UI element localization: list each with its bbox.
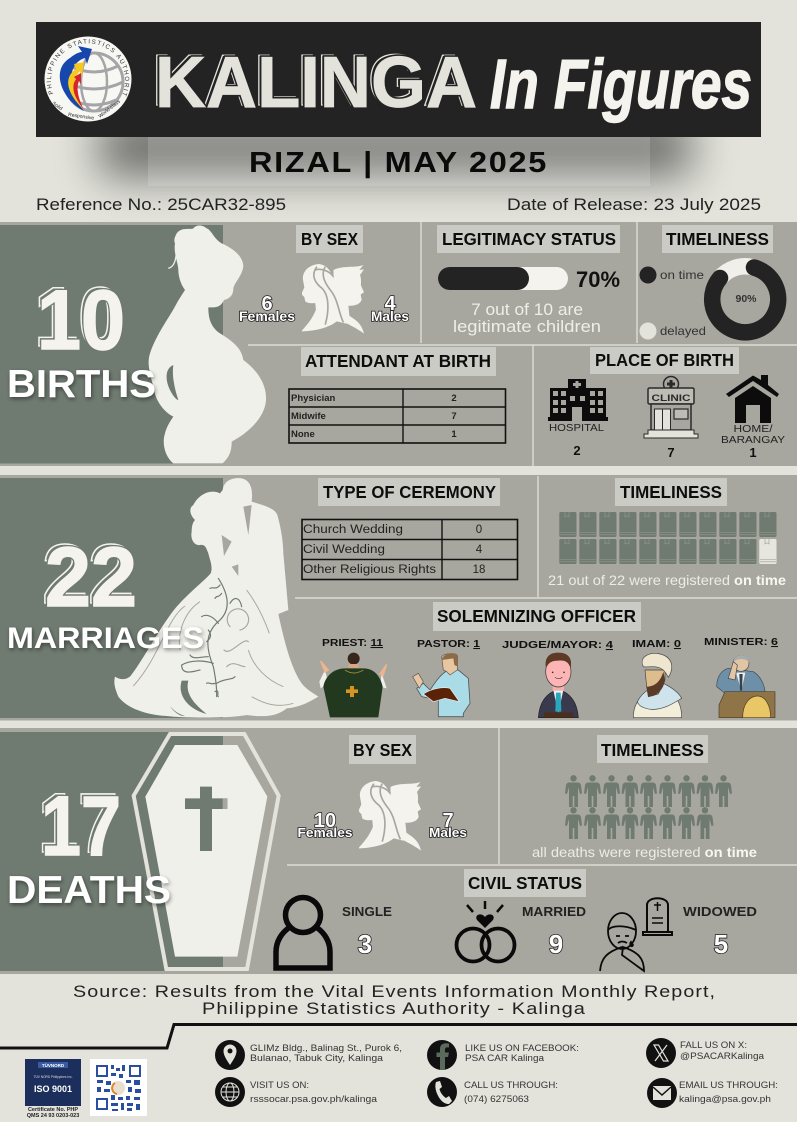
icon: wedding couple [114,478,318,718]
donut chart 90 percent: 90% [735,293,757,305]
contact: facebook: PSA CAR Kalinga [465,1053,545,1064]
icon: house [726,375,779,423]
table: attendant at birth: 2 [451,393,457,404]
heading: type of ceremony [318,478,500,506]
marriages label: MARRIAGES [7,622,204,655]
contact: address: Bulanao, Tabuk City, Kalinga [250,1053,384,1064]
home label: BARANGAY [721,434,785,446]
officer: priest: PRIEST: 11 [322,637,383,649]
heading: attendant at birth [301,347,496,376]
table: type of ceremony: Civil Wedding [303,544,385,556]
heading: marriage timeliness [615,478,727,506]
panel: births [0,222,797,466]
icon: wedding rings [456,901,514,962]
female deaths: 10 [314,810,336,832]
legend: timeliness: delayed [660,324,706,338]
table: type of ceremony: 18 [473,564,485,576]
heading: solemnizing officer: SOLEMNIZING OFFICER [437,606,636,626]
ISO certification badge: TÜV NORD Philippines Inc. [34,1075,73,1079]
panel: deaths [0,728,797,974]
source note: Source: Results from the Vital Events Information Monthly Report, [73,982,716,1001]
deaths count: 17 [41,779,121,873]
legitimacy note: legitimate children [453,318,601,336]
icon: coffin [134,734,279,969]
heading: civil status [464,869,586,897]
icon: hospital [548,379,608,434]
donut chart 90 percent [712,266,778,332]
female deaths [298,810,352,840]
contact: email [647,1078,778,1108]
officer: imam: IMAM: 0 [632,638,681,650]
contact: x account [646,1038,765,1068]
heading: solemnizing officer [433,602,641,631]
heading: place of birth: PLACE OF BIRTH [595,350,734,370]
legitimacy note: 7 out of 10 are [471,301,583,319]
contact: address [215,1040,402,1070]
subtitle band [148,137,650,186]
contact: phone: CALL US THROUGH: [464,1080,558,1091]
icon: single person [276,898,330,968]
births label: BIRTHS [7,363,156,406]
home count: 1 [749,445,757,460]
heading: deaths timeliness: TIMELINESS [601,740,704,760]
table: type of ceremony: Other Religious Rights [303,564,436,576]
table: type of ceremony: 4 [476,544,483,556]
icon: male and female heads [358,781,421,851]
ISO certification badge: ISO 9001 [34,1084,72,1094]
contact: x account: FALL US ON X: [680,1040,747,1051]
header shadow [100,120,690,175]
heading: legitimacy status: LEGITIMACY STATUS [442,229,616,249]
table: type of ceremony: Church Wedding [303,524,403,536]
table: attendant at birth [289,389,506,443]
marriages count: 22 [42,527,134,621]
contact: email: kalinga@psa.gov.ph [679,1094,771,1105]
home label: HOME/ [734,423,773,435]
widowed status [683,905,757,959]
officer: priest [319,637,387,717]
agency logo: Responsive [68,112,95,122]
contact: facebook [427,1040,579,1070]
contact: x account: @PSACARKalinga [680,1051,765,1062]
officer: judge or mayor: JUDGE/MAYOR: 4 [502,639,613,651]
marriage timeliness note: 21 out of 22 were registered on time [548,572,786,588]
ISO certification badge: Certificate No. PHP [28,1107,78,1113]
agency logo [44,36,132,122]
female deaths: Females [298,825,352,840]
source note: Philippine Statistics Authority - Kalinga [202,999,586,1018]
married status: MARRIED [522,905,586,919]
widowed status: 5 [714,929,728,959]
officer: minister: MINISTER: 6 [704,636,778,648]
single status [342,905,392,959]
deaths label: DEATHS [7,869,171,912]
table: type of ceremony: 0 [476,524,482,536]
person pictogram: 17 deaths [565,775,732,839]
home label [721,423,785,446]
footer rule [0,1024,797,1048]
book pictogram: 21 of 22 on time [559,512,776,564]
officer: pastor [413,638,480,717]
heading: type of ceremony: TYPE OF CEREMONY [323,482,496,502]
QR code [90,1059,147,1116]
male births [371,293,409,324]
officer: judge or mayor [502,639,613,718]
table: attendant at birth: 1 [451,429,457,440]
contact: website [215,1077,378,1107]
heading: attendant at birth: ATTENDANT AT BIRTH [305,351,491,371]
male deaths [429,810,467,840]
ISO certification badge: TÜVNORD [42,1062,65,1068]
agency logo: World-class [98,99,122,120]
widowed status: WIDOWED [683,905,757,919]
female births: 6 [261,293,273,315]
births count: 10 [37,273,125,367]
single status: SINGLE [342,905,392,919]
contact: email: EMAIL US THROUGH: [679,1080,778,1091]
KALINGA wordmark: KALINGA [155,43,477,123]
release date: Date of Release: 23 July 2025 [507,195,761,214]
female births [239,293,295,324]
icon: widow with tombstone [600,898,672,971]
births count: 10 [34,270,122,364]
table: attendant at birth: Physician [291,393,336,404]
legend: timeliness: on time [660,268,704,282]
female births: Females [239,309,295,324]
hospital count: 2 [573,443,581,458]
deaths count: 17 [38,776,118,870]
panel: marriages [0,475,797,720]
marriages count: 22 [45,530,137,624]
heading: marriage timeliness: TIMELINESS [620,482,722,502]
KALINGA wordmark: KALINGA [152,41,474,121]
male births: Males [371,309,409,324]
legitimacy note [453,301,601,336]
male deaths: Males [429,825,467,840]
icon: male and female heads [301,264,364,334]
heading: deaths by sex [349,735,416,764]
ISO certification badge: QMS 24 93 0203-023 [27,1113,79,1119]
contact: website: rsssocar.psa.gov.ph/kalinga [250,1094,378,1105]
contact: phone: (074) 6275063 [464,1094,529,1105]
heading: by sex [296,225,363,253]
marriages count: 22 [45,530,137,624]
heading: timeliness [662,225,773,253]
reference number: Reference No.: 25CAR32-895 [36,195,286,214]
contact: website: VISIT US ON: [250,1080,309,1091]
married status: 9 [549,929,563,959]
heading: timeliness: TIMELINESS [666,229,769,249]
contact: facebook: LIKE US ON FACEBOOK: [465,1043,579,1054]
table: type of ceremony [302,520,518,580]
progress bar 70 percent: 70% [576,267,620,292]
officer: imam [632,638,682,718]
agency logo: Solid [51,101,64,112]
single status: 3 [358,929,372,959]
heading: deaths timeliness [597,735,708,763]
icon: hospital: HOSPITAL [549,422,604,434]
officer: minister [704,636,778,718]
KALINGA wordmark: KALINGA [155,43,477,123]
heading: deaths by sex: BY SEX [353,740,412,760]
deaths timeliness note: all deaths were registered on time [532,844,757,860]
heading: legitimacy status [437,225,620,253]
contact: address: GLIMz Bldg., Balinag St., Purok 6, [250,1043,402,1054]
icon: pregnant silhouette [149,225,266,463]
header banner [36,22,761,137]
births count: 10 [37,273,125,367]
table: attendant at birth: Midwife [291,411,326,422]
legend: timeliness [640,266,706,340]
clinic count: 7 [667,445,675,460]
male births: 4 [384,293,396,315]
table: attendant at birth: None [291,429,315,440]
ISO certification badge [25,1059,81,1119]
officer: pastor: PASTOR: 1 [417,638,480,650]
icon: clinic [644,376,698,438]
icon: clinic: CLINIC [652,393,691,404]
deaths count: 17 [41,779,121,873]
subtitle band: RIZAL | MAY 2025 [249,147,548,179]
heading: civil status: CIVIL STATUS [468,873,582,893]
progress bar 70 percent [438,267,620,292]
married status [522,905,586,959]
heading: by sex: BY SEX [301,229,358,249]
table: attendant at birth: 7 [451,411,457,422]
contact: phone [427,1077,558,1107]
male deaths: 7 [442,810,454,832]
source note [73,982,716,1018]
